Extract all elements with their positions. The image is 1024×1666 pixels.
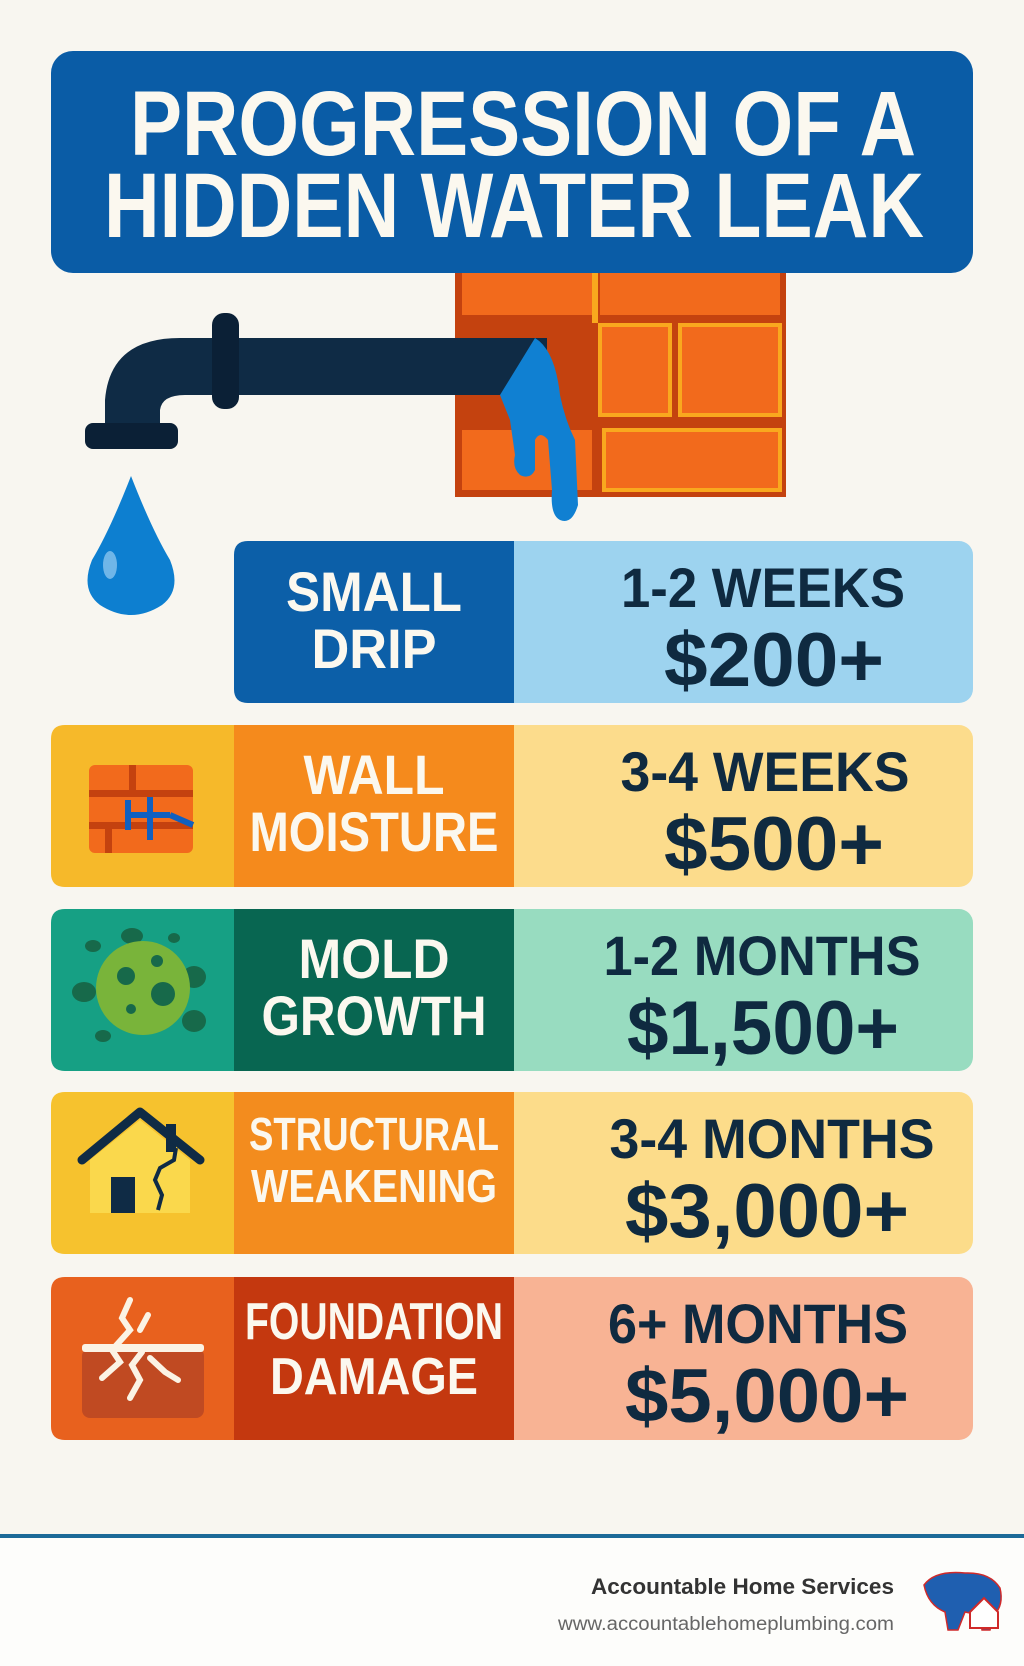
row: foundation damage: DAMAGE: [270, 1348, 478, 1406]
icon: brick wall: [455, 273, 786, 497]
row: structural weakening: STRUCTURAL: [249, 1108, 499, 1160]
row: mold growth: GROWTH: [262, 984, 486, 1047]
icon: mold: [72, 928, 206, 1042]
row: mold growth: [51, 909, 973, 1071]
icon: cracked house: [82, 1112, 200, 1213]
footer: company text: [557, 1574, 894, 1635]
icon: leaking pipe: [85, 313, 578, 521]
footer: company text: www.accountablehomeplumbing.com: [557, 1614, 894, 1635]
title: [51, 51, 973, 273]
row: structural weakening: WEAKENING: [251, 1160, 497, 1212]
icon: buffalo logo: [924, 1572, 1001, 1630]
row: structural weakening: $3,000+: [625, 1169, 909, 1254]
row: foundation damage: [51, 1277, 973, 1440]
icon: water drop: [88, 476, 174, 615]
row: foundation damage: $5,000+: [625, 1354, 909, 1439]
icon: wet brick: [89, 765, 193, 853]
row: mold growth: $1,500+: [627, 986, 899, 1071]
row: mold growth: 1-2 MONTHS: [604, 924, 920, 987]
footer: company text: Accountable Home Services: [591, 1574, 894, 1599]
row: mold growth: MOLD: [298, 927, 450, 990]
icon: cracked foundation: [82, 1300, 204, 1418]
row: wall moisture: [51, 725, 973, 887]
row: small drip: [234, 541, 973, 703]
row: small drip: 1-2 WEEKS: [621, 556, 905, 619]
row: wall moisture: WALL: [304, 743, 444, 806]
row: wall moisture: 3-4 WEEKS: [620, 740, 910, 803]
row: wall moisture: MOISTURE: [250, 800, 498, 863]
row: wall moisture: $500+: [664, 802, 884, 887]
row: foundation damage: 6+ MONTHS: [608, 1292, 908, 1355]
row: structural weakening: 3-4 MONTHS: [610, 1107, 934, 1170]
row: small drip: SMALL: [286, 560, 462, 623]
row: foundation damage: FOUNDATION: [245, 1293, 503, 1351]
row: structural weakening: [51, 1092, 973, 1254]
row: small drip: $200+: [664, 618, 884, 703]
row: small drip: DRIP: [312, 617, 436, 680]
